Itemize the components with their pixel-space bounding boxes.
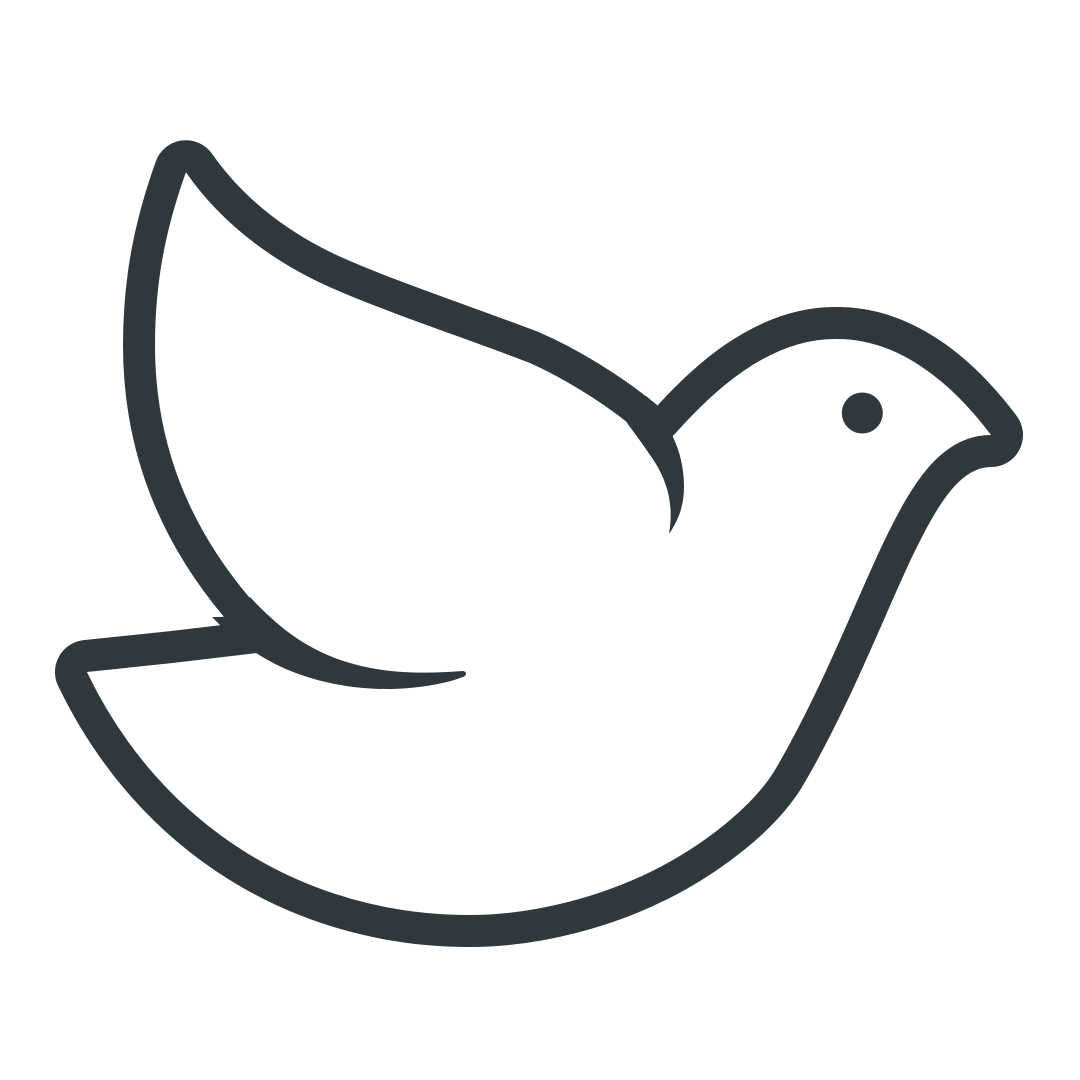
wing tapered tip near tail [212, 597, 466, 689]
wing tapered tip near neck [625, 396, 684, 534]
dove head, body and tail outline [71, 323, 1007, 931]
icon: dove eye [842, 392, 883, 434]
wing outline [139, 156, 640, 640]
